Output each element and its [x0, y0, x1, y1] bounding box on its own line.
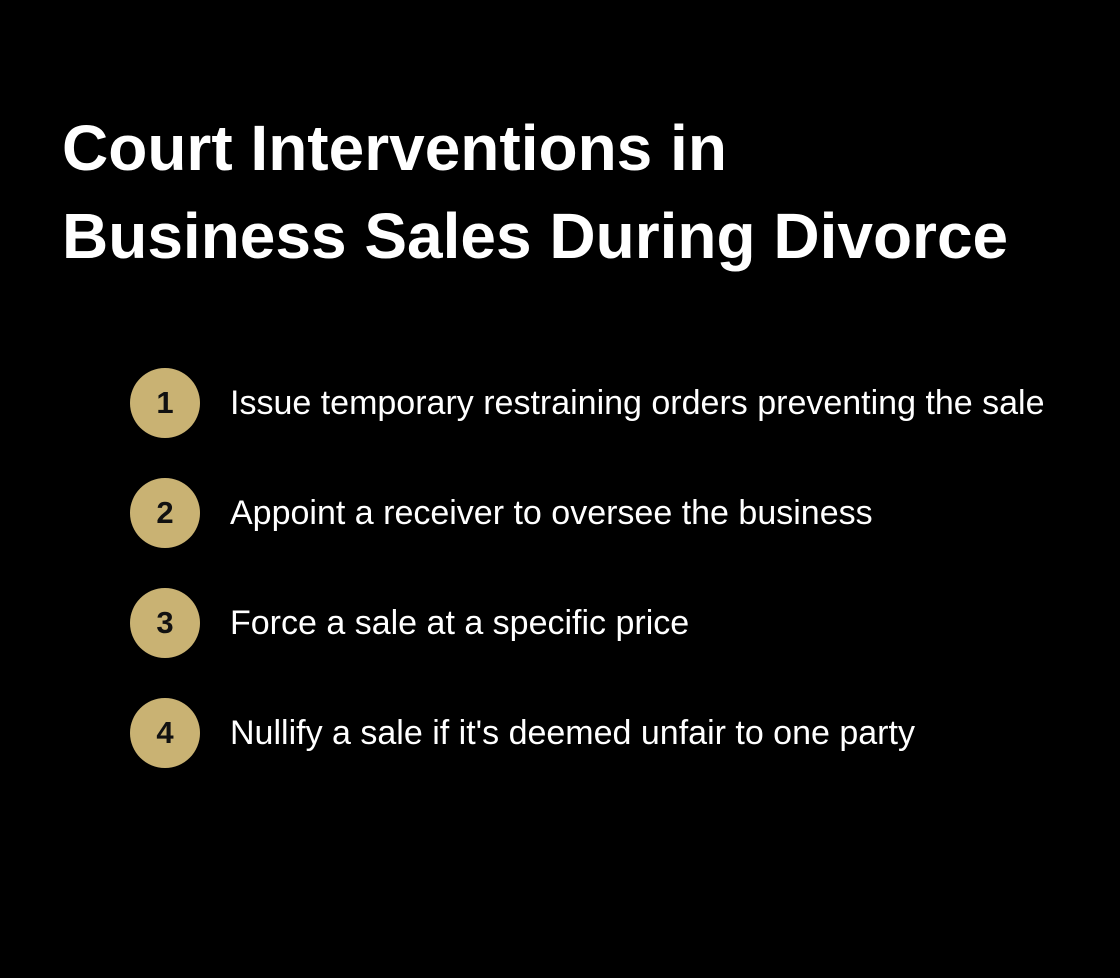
text 3: Force a sale at a specific price — [230, 604, 689, 642]
item 4 — [130, 698, 915, 768]
text 2: Appoint a receiver to oversee the business — [230, 494, 873, 532]
badge 1: 1 — [156, 385, 174, 420]
text 4: Nullify a sale if it's deemed unfair to one party — [230, 714, 915, 752]
title: Court Interventions in — [62, 112, 727, 184]
badge 2: 2 — [156, 495, 174, 530]
title: Business Sales During Divorce — [62, 200, 1008, 272]
badge 3: 3 — [156, 605, 174, 640]
badge 3 — [130, 588, 200, 658]
badge 1 — [130, 368, 200, 438]
item 2 — [130, 478, 873, 548]
badge 2 — [130, 478, 200, 548]
item 1 — [130, 368, 1045, 438]
badge 4: 4 — [156, 715, 174, 750]
title — [62, 112, 1008, 272]
item 3 — [130, 588, 689, 658]
badge 4 — [130, 698, 200, 768]
text 1: Issue temporary restraining orders preventing the sale — [230, 384, 1045, 422]
